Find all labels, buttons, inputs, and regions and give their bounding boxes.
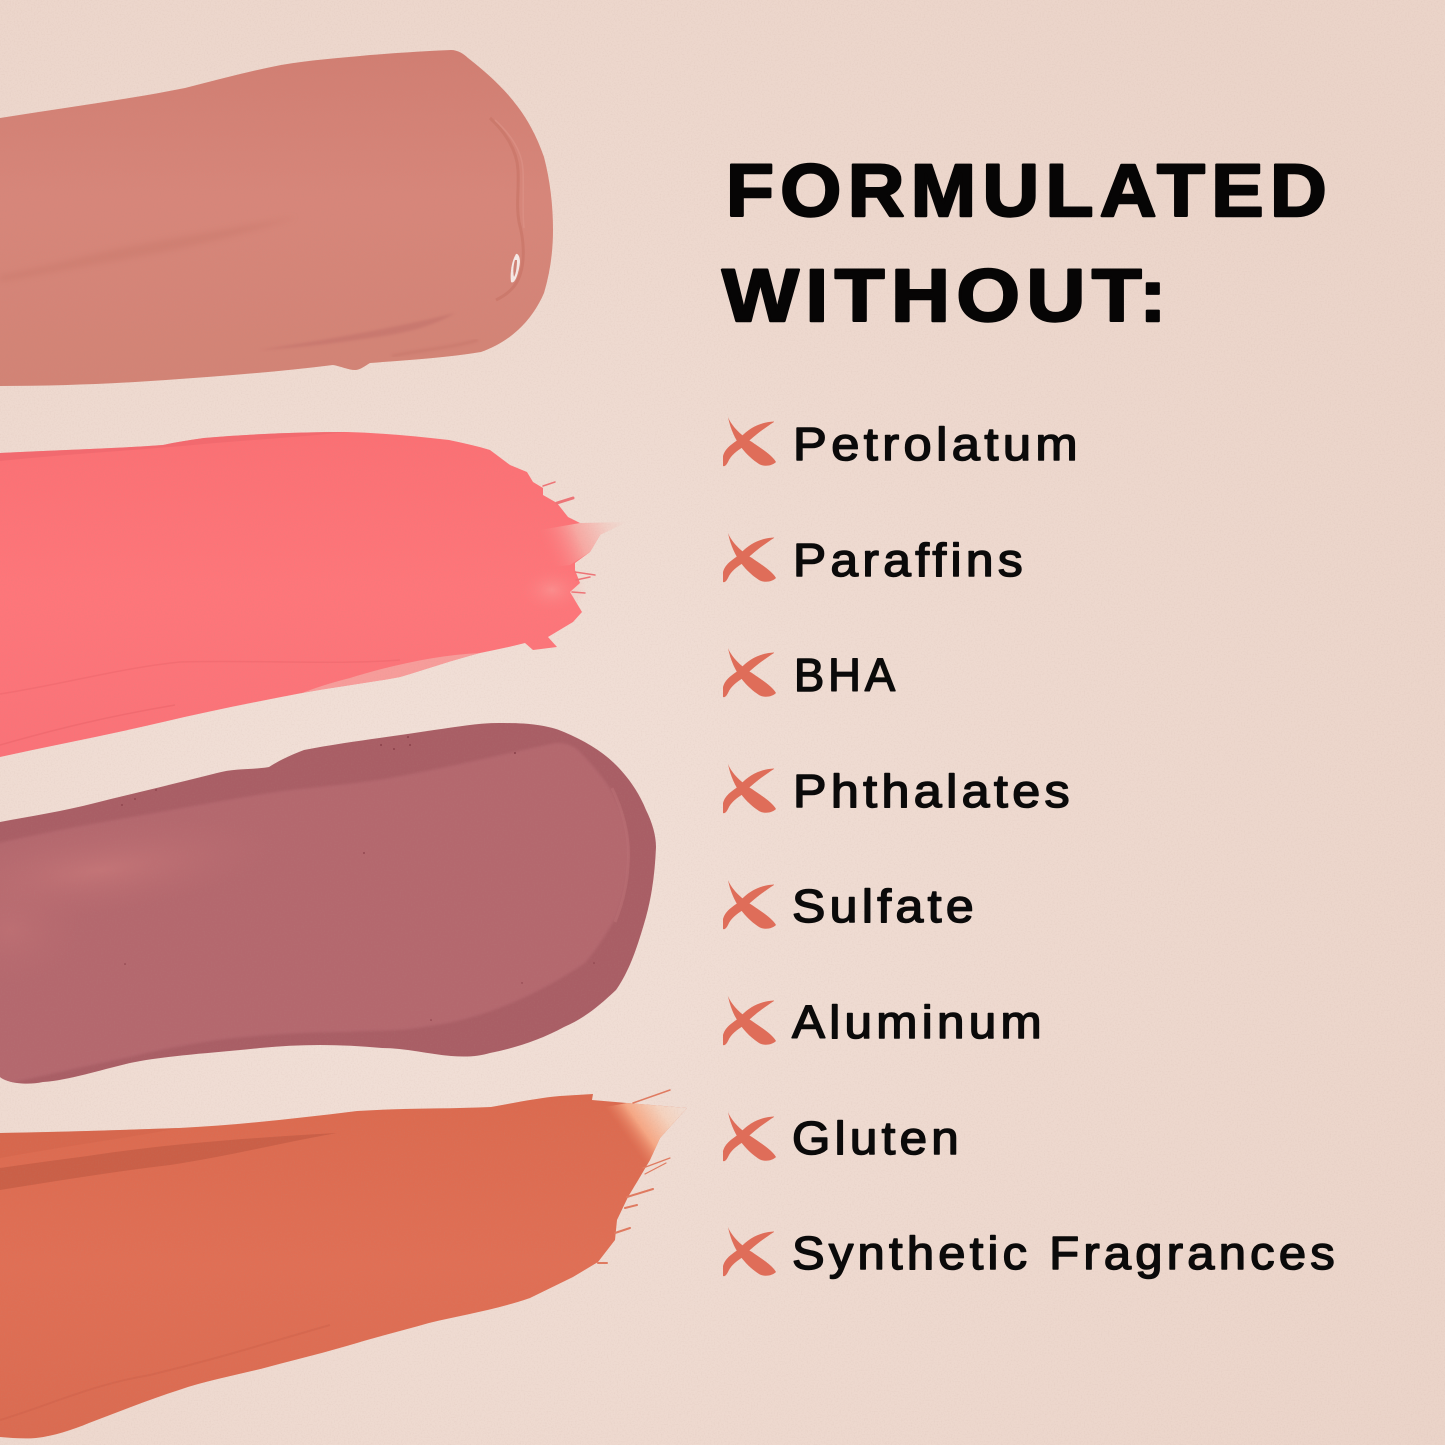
item: Paraffins	[723, 533, 1027, 586]
item: Sulfate: Sulfate	[792, 880, 978, 932]
heading: WITHOUT:	[722, 254, 1173, 337]
item: BHA	[723, 648, 899, 701]
item: Gluten: Gluten	[792, 1112, 963, 1164]
item: Sulfate	[723, 880, 978, 932]
item: BHA: BHA	[794, 649, 899, 701]
item: Synthetic Fragrances: Synthetic Fragrances	[792, 1227, 1339, 1279]
item: Paraffins: Paraffins	[793, 534, 1027, 586]
bristle spikes	[543, 482, 595, 593]
item: Petrolatum: Petrolatum	[793, 418, 1082, 470]
swatch: terracotta orange	[0, 1090, 687, 1438]
bristle spikes	[598, 1090, 670, 1263]
paint tail	[595, 1103, 687, 1178]
item: Aluminum: Aluminum	[792, 996, 1046, 1048]
heading	[722, 149, 1333, 337]
item: Phthalates: Phthalates	[793, 765, 1074, 817]
speckles	[121, 736, 595, 1021]
heading: FORMULATED	[726, 149, 1333, 232]
swatch: bright coral pink	[0, 432, 627, 757]
swatch: nude rose	[0, 50, 553, 386]
list: excluded ingredients	[723, 417, 1339, 1279]
paint tail	[530, 522, 627, 570]
item: Gluten	[723, 1112, 963, 1164]
swatch: dusty mauve	[0, 723, 656, 1087]
